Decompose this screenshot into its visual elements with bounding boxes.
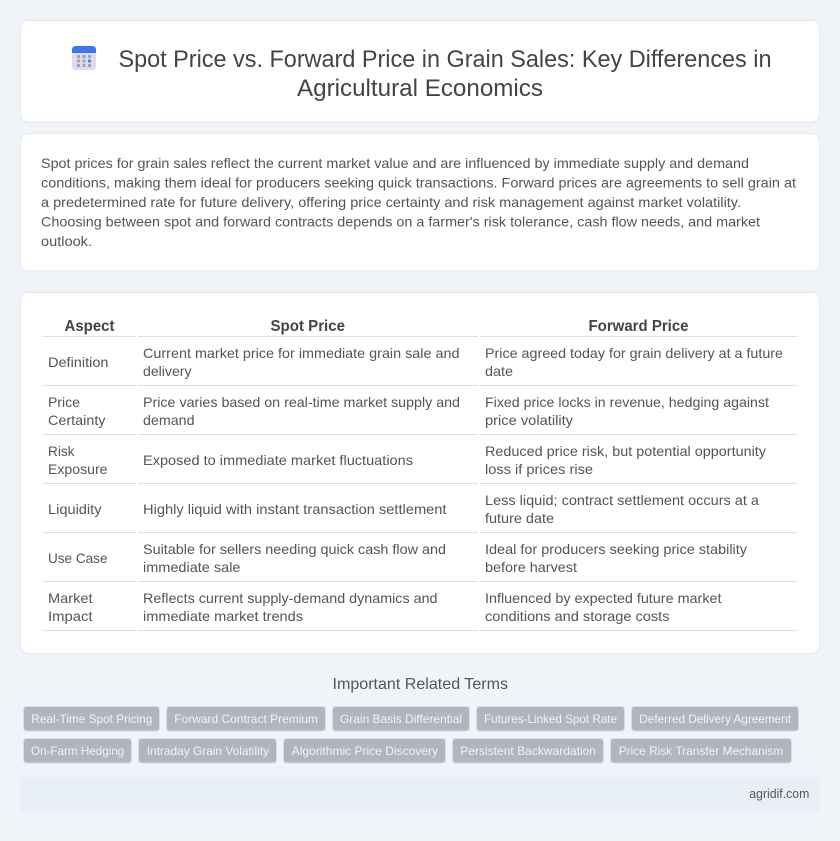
title: Spot Price vs. Forward Price in Grain Sales: Key Differences in bbox=[118, 46, 772, 73]
row: risk exposure: Exposed to immediate market fluctuations bbox=[143, 452, 413, 468]
row: definition: delivery bbox=[143, 363, 192, 379]
row: price certainty: price volatility bbox=[485, 412, 573, 428]
row: risk exposure bbox=[43, 443, 797, 484]
row: definition: date bbox=[485, 363, 513, 379]
row: liquidity: Highly liquid with instant transaction settlement bbox=[143, 501, 447, 517]
panel: intro text bbox=[20, 134, 820, 271]
tags: related terms: Price Risk Transfer Mechanism bbox=[619, 744, 783, 758]
panel: header bbox=[20, 20, 820, 122]
title bbox=[118, 46, 772, 102]
tags: related terms: Intraday Grain Volatility bbox=[147, 744, 269, 758]
row: market impact: conditions and storage costs bbox=[485, 608, 670, 624]
tags: related terms: On-Farm Hedging bbox=[31, 744, 124, 758]
tags: related terms: Futures-Linked Spot Rate bbox=[484, 712, 617, 726]
row: risk exposure: Risk bbox=[48, 443, 75, 459]
row: price certainty: Fixed price locks in revenue, hedging against bbox=[485, 394, 769, 410]
row: use case: immediate sale bbox=[143, 559, 241, 575]
row: price certainty: Certainty bbox=[48, 412, 106, 428]
row: definition: Price agreed today for grain delivery at a future bbox=[485, 345, 783, 361]
tags: related terms: Persistent Backwardation bbox=[460, 744, 596, 758]
tags: related terms: Grain Basis Differential bbox=[340, 712, 462, 726]
row: price certainty: Price varies based on real-time market supply and bbox=[143, 394, 460, 410]
intro paragraph: conditions, making them ideal for producers seeking quick transactions. Forward prices are agreements to sell grain at bbox=[41, 174, 796, 190]
row: market impact: Market bbox=[48, 590, 93, 606]
tags: related terms: Real-Time Spot Pricing bbox=[31, 712, 152, 726]
table header row: Forward Price bbox=[588, 318, 689, 335]
intro paragraph: Spot prices for grain sales reflect the current market value and are influenced by immediate supply and demand bbox=[41, 155, 749, 171]
footer bbox=[20, 777, 820, 811]
row: use case: before harvest bbox=[485, 559, 577, 575]
section heading: related terms: Important Related Terms bbox=[332, 676, 508, 693]
row: liquidity: future date bbox=[485, 510, 554, 526]
icon: calendar bbox=[72, 46, 96, 70]
tags: related terms: Forward Contract Premium bbox=[174, 712, 318, 726]
row: definition: Current market price for immediate grain sale and bbox=[143, 345, 460, 361]
row: liquidity: Less liquid; contract settlement occurs at a bbox=[485, 492, 759, 508]
intro paragraph bbox=[41, 155, 796, 249]
row: liquidity bbox=[43, 492, 797, 533]
row: price certainty: Price bbox=[48, 394, 80, 410]
title: Agricultural Economics bbox=[297, 75, 543, 102]
row: risk exposure: loss if prices rise bbox=[485, 461, 593, 477]
row: market impact: Influenced by expected future market bbox=[485, 590, 722, 606]
tags: related terms bbox=[24, 706, 798, 763]
intro paragraph: outlook. bbox=[41, 233, 92, 249]
table header row: Spot Price bbox=[270, 318, 345, 335]
row: risk exposure: Reduced price risk, but potential opportunity bbox=[485, 443, 766, 459]
row: price certainty: demand bbox=[143, 412, 194, 428]
table header row bbox=[43, 318, 797, 337]
footer: agridif.com bbox=[749, 786, 809, 801]
row: use case: Use Case bbox=[48, 550, 108, 566]
row: risk exposure: Exposure bbox=[48, 461, 108, 477]
row: liquidity: Liquidity bbox=[48, 501, 102, 517]
tags: related terms: Deferred Delivery Agreement bbox=[639, 712, 792, 726]
row: market impact: Impact bbox=[48, 608, 93, 624]
table header row: Aspect bbox=[64, 318, 115, 335]
tags: related terms: Algorithmic Price Discovery bbox=[292, 744, 438, 758]
row: market impact bbox=[43, 590, 797, 631]
row: use case bbox=[43, 541, 797, 582]
intro paragraph: Choosing between spot and forward contracts depends on a farmer's risk tolerance, cash flow needs, and market bbox=[41, 214, 760, 230]
row: market impact: immediate market trends bbox=[143, 608, 303, 624]
panel: comparison table bbox=[20, 292, 820, 654]
row: price certainty bbox=[43, 394, 797, 435]
row: use case: Ideal for producers seeking price stability bbox=[485, 541, 747, 557]
intro paragraph: a predetermined rate for future delivery, offering price certainty and risk management against market volatility. bbox=[41, 194, 741, 210]
row: definition: Definition bbox=[48, 354, 108, 370]
row: definition bbox=[43, 345, 797, 386]
row: use case: Suitable for sellers needing quick cash flow and bbox=[143, 541, 446, 557]
row: market impact: Reflects current supply-demand dynamics and bbox=[143, 590, 438, 606]
